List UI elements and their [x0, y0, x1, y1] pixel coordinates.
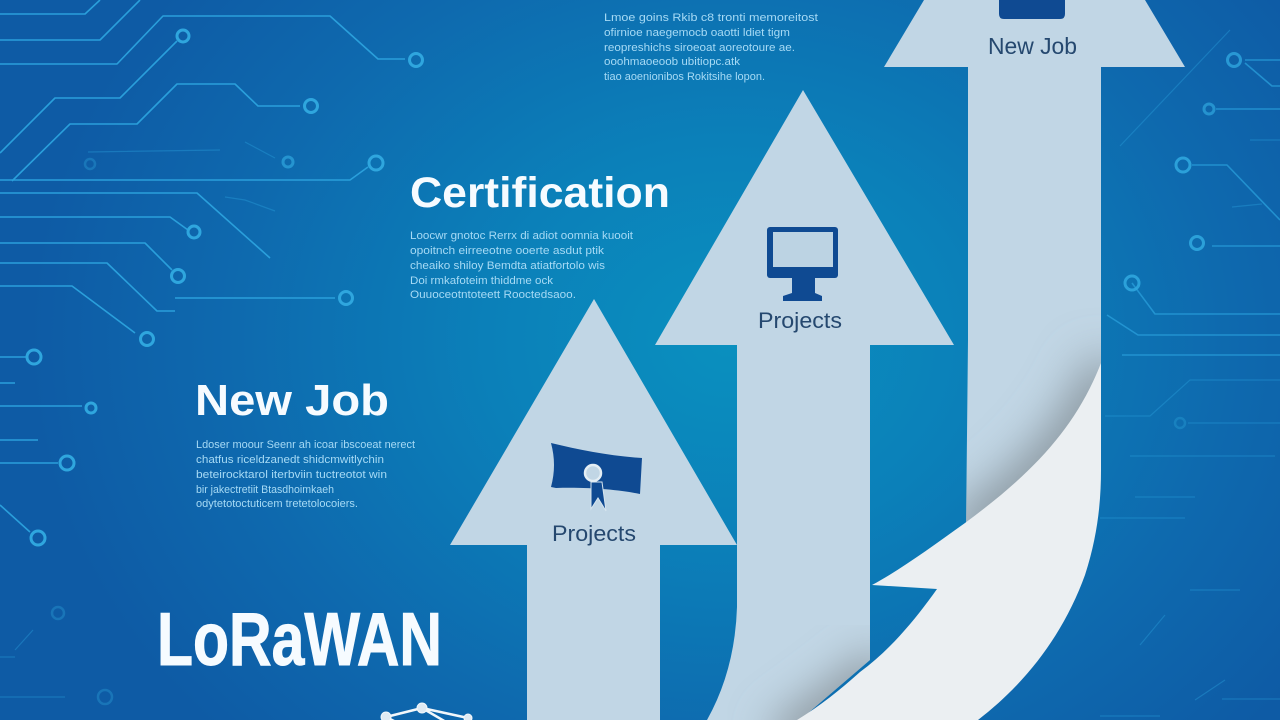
arrow 3: tallest arrow	[884, 0, 1185, 540]
heading: new job: New Job	[195, 376, 389, 425]
circuit lines: upper left	[0, 0, 422, 346]
text block: new job paragraph	[196, 439, 415, 510]
icon: network nodes	[381, 703, 472, 720]
icon: diploma scroll	[548, 443, 642, 511]
text block: certification paragraph: Ouuoceotntoteett Rooctedsaoo.	[410, 289, 576, 301]
label: new job on arrow: New Job	[988, 33, 1077, 59]
text block: certification paragraph	[410, 230, 633, 301]
text block: certification paragraph: Doi rmkafoteim thiddme ock	[410, 275, 554, 287]
text block: new job paragraph: Ldoser moour Seenr ah icoar ibscoeat nerect	[196, 439, 415, 451]
label: projects on short arrow: Projects	[552, 521, 636, 546]
text block: certification paragraph: Loocwr gnotoc Rerrx di adiot oomnia kuooit	[410, 230, 633, 242]
text block: top paragraph: tiao aoenionibos Rokitsihe lopon.	[604, 71, 765, 83]
arrow 1: shortest arrow	[450, 299, 737, 720]
text block: top paragraph: Lmoe goins Rkib c8 tronti memoreitost	[604, 12, 818, 24]
text block: certification paragraph: opoitnch eirreeotne ooerte asdut ptik	[410, 245, 605, 257]
circuit lines: lower left	[0, 350, 112, 704]
text block: top paragraph: ooohmaoeoob ubitiopc.atk	[604, 56, 741, 68]
icon: monitor	[767, 227, 838, 301]
icon: new job	[999, 0, 1065, 19]
label: projects on middle arrow: Projects	[758, 308, 842, 333]
text block: new job paragraph: beteirocktarol iterbviin tuctreotot win	[196, 469, 387, 481]
white curved swoosh	[797, 363, 1101, 720]
text block: new job paragraph: bir jakectretiit Btasdhoimkaeh	[196, 484, 334, 496]
text block: top paragraph	[604, 12, 818, 83]
text block: new job paragraph: odytetotoctuticem tretetolocoiers.	[196, 498, 358, 510]
text block: top paragraph: ofirnioe naegemocb oaotti ldiet tigm	[604, 27, 790, 39]
text block: certification paragraph: cheaiko shiloy Bemdta atiatfortolo wis	[410, 260, 606, 272]
text block: top paragraph: reopreshichs siroeoat aoreotoure ae.	[604, 42, 795, 54]
text block: new job paragraph: chatfus riceldzanedt shidcmwitlychin	[196, 454, 384, 466]
circuit lines: right	[1100, 30, 1280, 716]
arrow 2: middle arrow	[655, 90, 954, 720]
heading: certification: Certification	[410, 169, 670, 217]
title: LoRaWAN: LoRaWAN	[157, 597, 442, 681]
